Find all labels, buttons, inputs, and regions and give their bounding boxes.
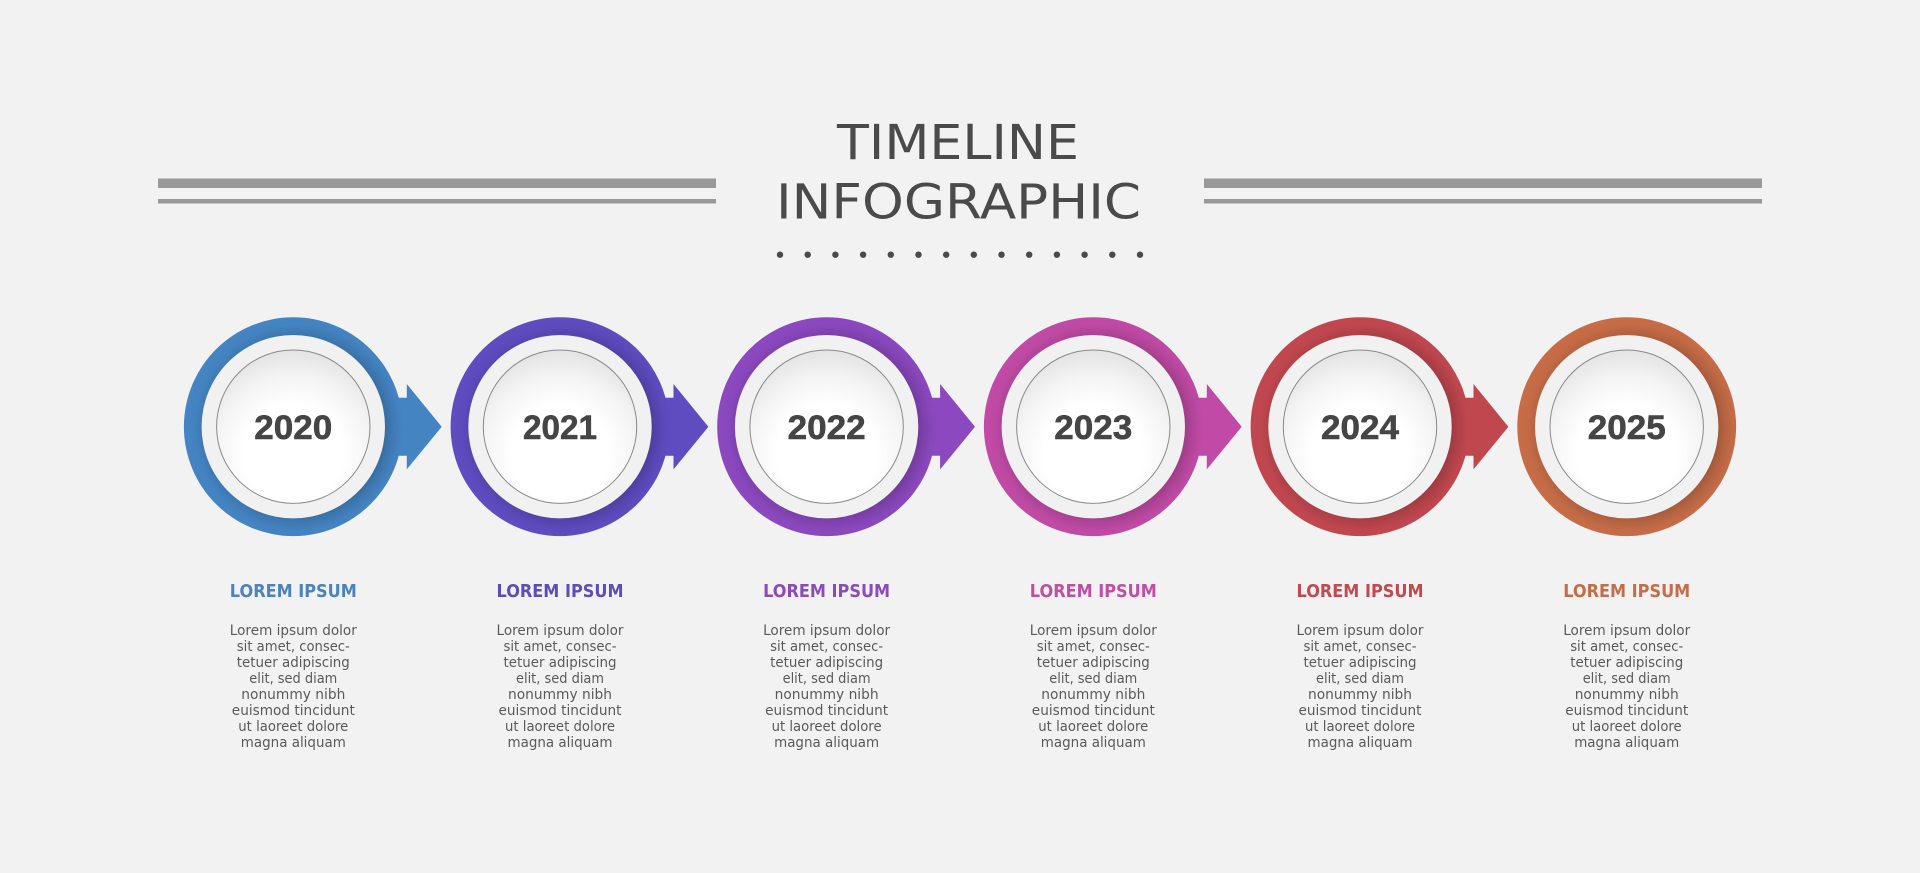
body text 2025: euismod tincidunt [1565,703,1689,719]
body text 2020: elit, sed diam [249,671,337,687]
body text 2022: elit, sed diam [783,671,871,687]
body text 2023: nonummy nibh [1041,687,1145,703]
body text 2024: ut laoreet dolore [1305,719,1415,735]
body text 2022: sit amet, consec- [770,639,883,655]
circle badge 2020: 2020 [254,409,332,447]
body text 2021: Lorem ipsum dolor [496,623,624,639]
circle badge 2025: 2025 [1588,409,1666,447]
body text 2021: nonummy nibh [508,687,612,703]
step 2022 [717,317,975,751]
circle badge 2024 [1251,317,1508,536]
heading 2024: LOREM IPSUM [1296,582,1424,602]
body text 2021: ut laoreet dolore [505,719,615,735]
circle badge 2022 [717,317,975,536]
body text 2023: tetuer adipiscing [1037,655,1150,671]
body text 2023: elit, sed diam [1049,671,1137,687]
right title rules [1204,178,1762,204]
arrow 2020 [383,384,442,469]
title: TIMELINE [836,115,1079,171]
body text 2025: Lorem ipsum dolor [1563,623,1690,639]
body text 2021 [496,623,624,751]
step 2021 [451,317,708,751]
circle badge 2022: 2022 [788,409,866,447]
circle badge 2023: 2023 [1054,409,1132,447]
body text 2020: magna aliquam [241,735,346,751]
body text 2022: magna aliquam [774,735,879,751]
body text 2022: tetuer adipiscing [770,655,883,671]
body text 2020: sit amet, consec- [237,639,350,655]
body text 2025: sit amet, consec- [1570,639,1683,655]
circle badge 2024: 2024 [1321,409,1399,447]
body text 2025: nonummy nibh [1575,687,1679,703]
circle badge 2023 [984,317,1242,536]
body text 2025: tetuer adipiscing [1570,655,1683,671]
step 2025 [1517,317,1736,751]
heading 2020: LOREM IPSUM [230,582,357,602]
body text 2023: magna aliquam [1041,735,1146,751]
circle badge 2025 [1517,317,1736,536]
body text 2022: euismod tincidunt [765,703,889,719]
dotted divider [777,252,1143,258]
title [776,115,1141,230]
body text 2022 [763,623,890,751]
body text 2023: sit amet, consec- [1037,639,1150,655]
body text 2024: tetuer adipiscing [1304,655,1416,671]
step 2023 [984,317,1242,751]
body text 2020: ut laoreet dolore [238,719,348,735]
step 2020 [184,317,442,751]
body text 2020: tetuer adipiscing [237,655,350,671]
left title rules [158,178,716,204]
body text 2023: ut laoreet dolore [1038,719,1148,735]
body text 2024: elit, sed diam [1316,671,1404,687]
arrow 2022 [917,384,975,469]
body text 2023: Lorem ipsum dolor [1030,623,1157,639]
body text 2020: nonummy nibh [241,687,345,703]
body text 2025: ut laoreet dolore [1572,719,1682,735]
arrow 2024 [1450,384,1508,469]
circle badge 2021 [451,317,708,536]
circle badge 2020 [184,317,442,536]
body text 2022: Lorem ipsum dolor [763,623,890,639]
body text 2022: ut laoreet dolore [772,719,882,735]
heading 2025: LOREM IPSUM [1563,582,1690,602]
title: INFOGRAPHIC [776,174,1141,230]
arrow 2021 [650,384,708,469]
step 2024 [1251,317,1508,751]
body text 2020: euismod tincidunt [232,703,355,719]
body text 2020 [230,623,357,751]
body text 2023 [1030,623,1157,751]
heading 2021: LOREM IPSUM [496,582,624,602]
body text 2021: sit amet, consec- [504,639,616,655]
body text 2022: nonummy nibh [775,687,879,703]
body text 2021: magna aliquam [508,735,612,751]
arrow 2023 [1183,384,1242,469]
heading 2022: LOREM IPSUM [763,582,890,602]
body text 2024: euismod tincidunt [1298,703,1422,719]
body text 2021: tetuer adipiscing [504,655,616,671]
circle badge 2021: 2021 [523,409,597,447]
body text 2024: sit amet, consec- [1304,639,1416,655]
body text 2020: Lorem ipsum dolor [230,623,357,639]
body text 2024 [1296,623,1424,751]
body text 2025 [1563,623,1690,751]
body text 2021: elit, sed diam [516,671,604,687]
body text 2025: magna aliquam [1574,735,1679,751]
body text 2023: euismod tincidunt [1032,703,1155,719]
heading 2023: LOREM IPSUM [1030,582,1157,602]
body text 2024: Lorem ipsum dolor [1296,623,1424,639]
body text 2024: nonummy nibh [1308,687,1412,703]
body text 2025: elit, sed diam [1583,671,1671,687]
body text 2024: magna aliquam [1308,735,1412,751]
body text 2021: euismod tincidunt [498,703,622,719]
